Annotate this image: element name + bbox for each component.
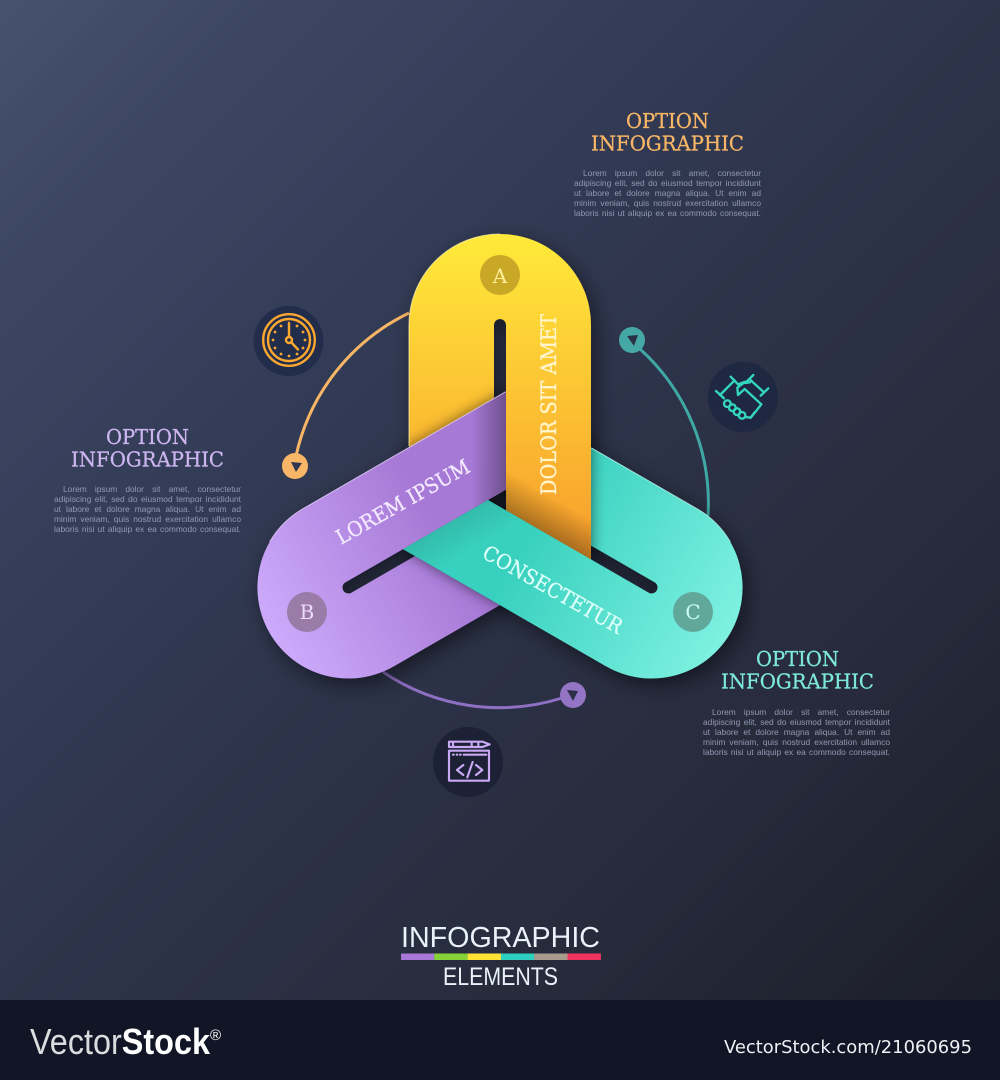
- paragraph: right: laboris nisi ut aliquip ex ea commodo consequat.: [703, 747, 890, 757]
- paragraph: right: ut labore et dolore magna aliqua. Ut enim ad: [703, 727, 890, 737]
- heading: option top: INFOGRAPHIC: [591, 132, 744, 156]
- heading: option left: [71, 425, 224, 472]
- heading: option right: INFOGRAPHIC: [721, 670, 874, 694]
- logo: infographic elements: INFOGRAPHIC: [401, 922, 600, 954]
- arc connector with marker: A: [282, 313, 409, 479]
- paragraph: top: ut labore et dolore magna aliqua. Ut enim ad: [574, 188, 761, 198]
- three interlocked ring links: [224, 234, 776, 712]
- teal front strap: [403, 475, 649, 667]
- icon: handshake: [708, 362, 778, 432]
- base silhouette with outer shadow: [224, 234, 776, 712]
- colour bar: [401, 954, 601, 960]
- badge B: [287, 592, 327, 632]
- yellow front strap: [506, 324, 591, 559]
- paragraph: left: minim veniam, quis nostrud exercitation ullamco: [54, 514, 241, 524]
- purple front strap: [303, 391, 548, 583]
- paragraph: right: adipiscing elit, sed do eiusmod tempor incididunt: [703, 717, 890, 727]
- strap label: lorem ipsum: LOREM IPSUM: [332, 455, 474, 549]
- strap label: dolor sit amet: DOLOR SIT AMET: [537, 314, 561, 495]
- paragraph: right: minim veniam, quis nostrud exercitation ullamco: [703, 737, 890, 747]
- paragraph: top: laboris nisi ut aliquip ex ea commodo consequat.: [574, 208, 761, 218]
- heading: option right: OPTION: [756, 647, 839, 671]
- paragraph: top: minim veniam, quis nostrud exercitation ullamco: [574, 198, 761, 208]
- footer image url: VectorStock.com/21060695: [724, 1038, 972, 1058]
- icon: code window and pencil: [433, 727, 503, 797]
- footer band: [0, 1000, 1000, 1080]
- heading: option top: OPTION: [626, 109, 709, 133]
- strap label: consectetur: CONSECTETUR: [479, 540, 627, 639]
- paragraph: left: Lorem ipsum dolor sit amet, consectetur: [63, 484, 241, 494]
- paragraph: right: Lorem ipsum dolor sit amet, consectetur: [712, 707, 890, 717]
- paragraph: right: [703, 707, 890, 757]
- badge B: B: [300, 600, 314, 624]
- arc connector with marker: B: [383, 672, 586, 708]
- paragraph: left: adipiscing elit, sed do eiusmod tempor incididunt: [54, 494, 241, 504]
- icon: clock: [254, 306, 324, 376]
- badge A: [480, 255, 520, 295]
- logo: infographic elements: [401, 922, 601, 991]
- heading: option left: INFOGRAPHIC: [71, 448, 224, 472]
- paragraph: top: Lorem ipsum dolor sit amet, consectetur: [583, 168, 761, 178]
- logo: infographic elements: ELEMENTS: [443, 963, 558, 991]
- heading: option right: [721, 647, 874, 694]
- paragraph: top: [574, 168, 761, 218]
- arc connector with marker: C: [619, 327, 708, 516]
- edge highlights: [270, 234, 730, 542]
- badge A: A: [492, 264, 508, 288]
- heading: option left: OPTION: [106, 425, 189, 449]
- badge C: C: [685, 600, 701, 624]
- registered mark: ®: [210, 1027, 221, 1044]
- paragraph: top: adipiscing elit, sed do eiusmod tempor incididunt: [574, 178, 761, 188]
- paragraph: left: laboris nisi ut aliquip ex ea commodo consequat.: [54, 524, 241, 534]
- shadows cast by the front straps: [403, 391, 591, 609]
- paragraph: left: [54, 484, 241, 534]
- heading: option top: [591, 109, 744, 156]
- paragraph: left: ut labore et dolore magna aliqua. Ut enim ad: [54, 504, 241, 514]
- footer wordmark: VectorStock: [30, 1021, 211, 1062]
- badge C: [673, 592, 713, 632]
